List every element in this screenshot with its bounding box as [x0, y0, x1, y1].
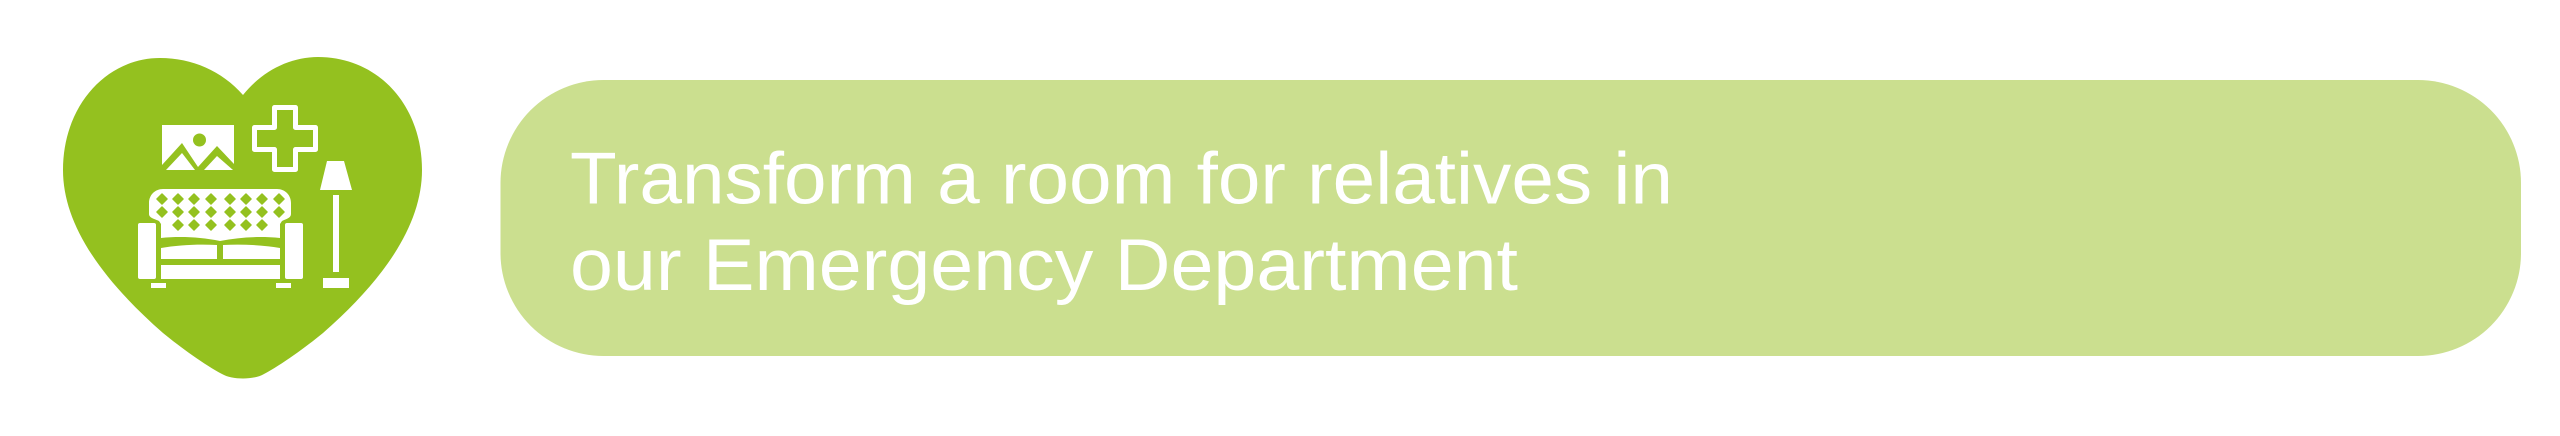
headline text: Transform a room for relatives in [570, 138, 1673, 220]
icon: floor lamp [320, 161, 352, 288]
icon: framed picture [162, 125, 234, 170]
heart icon: room for relatives [63, 57, 422, 378]
panel: headline pill [500, 80, 2521, 356]
heart background [63, 57, 422, 378]
icon: medical cross [254, 108, 316, 170]
icon: sofa [138, 189, 303, 288]
headline text: our Emergency Department [570, 225, 1518, 306]
headline text [570, 138, 1673, 306]
